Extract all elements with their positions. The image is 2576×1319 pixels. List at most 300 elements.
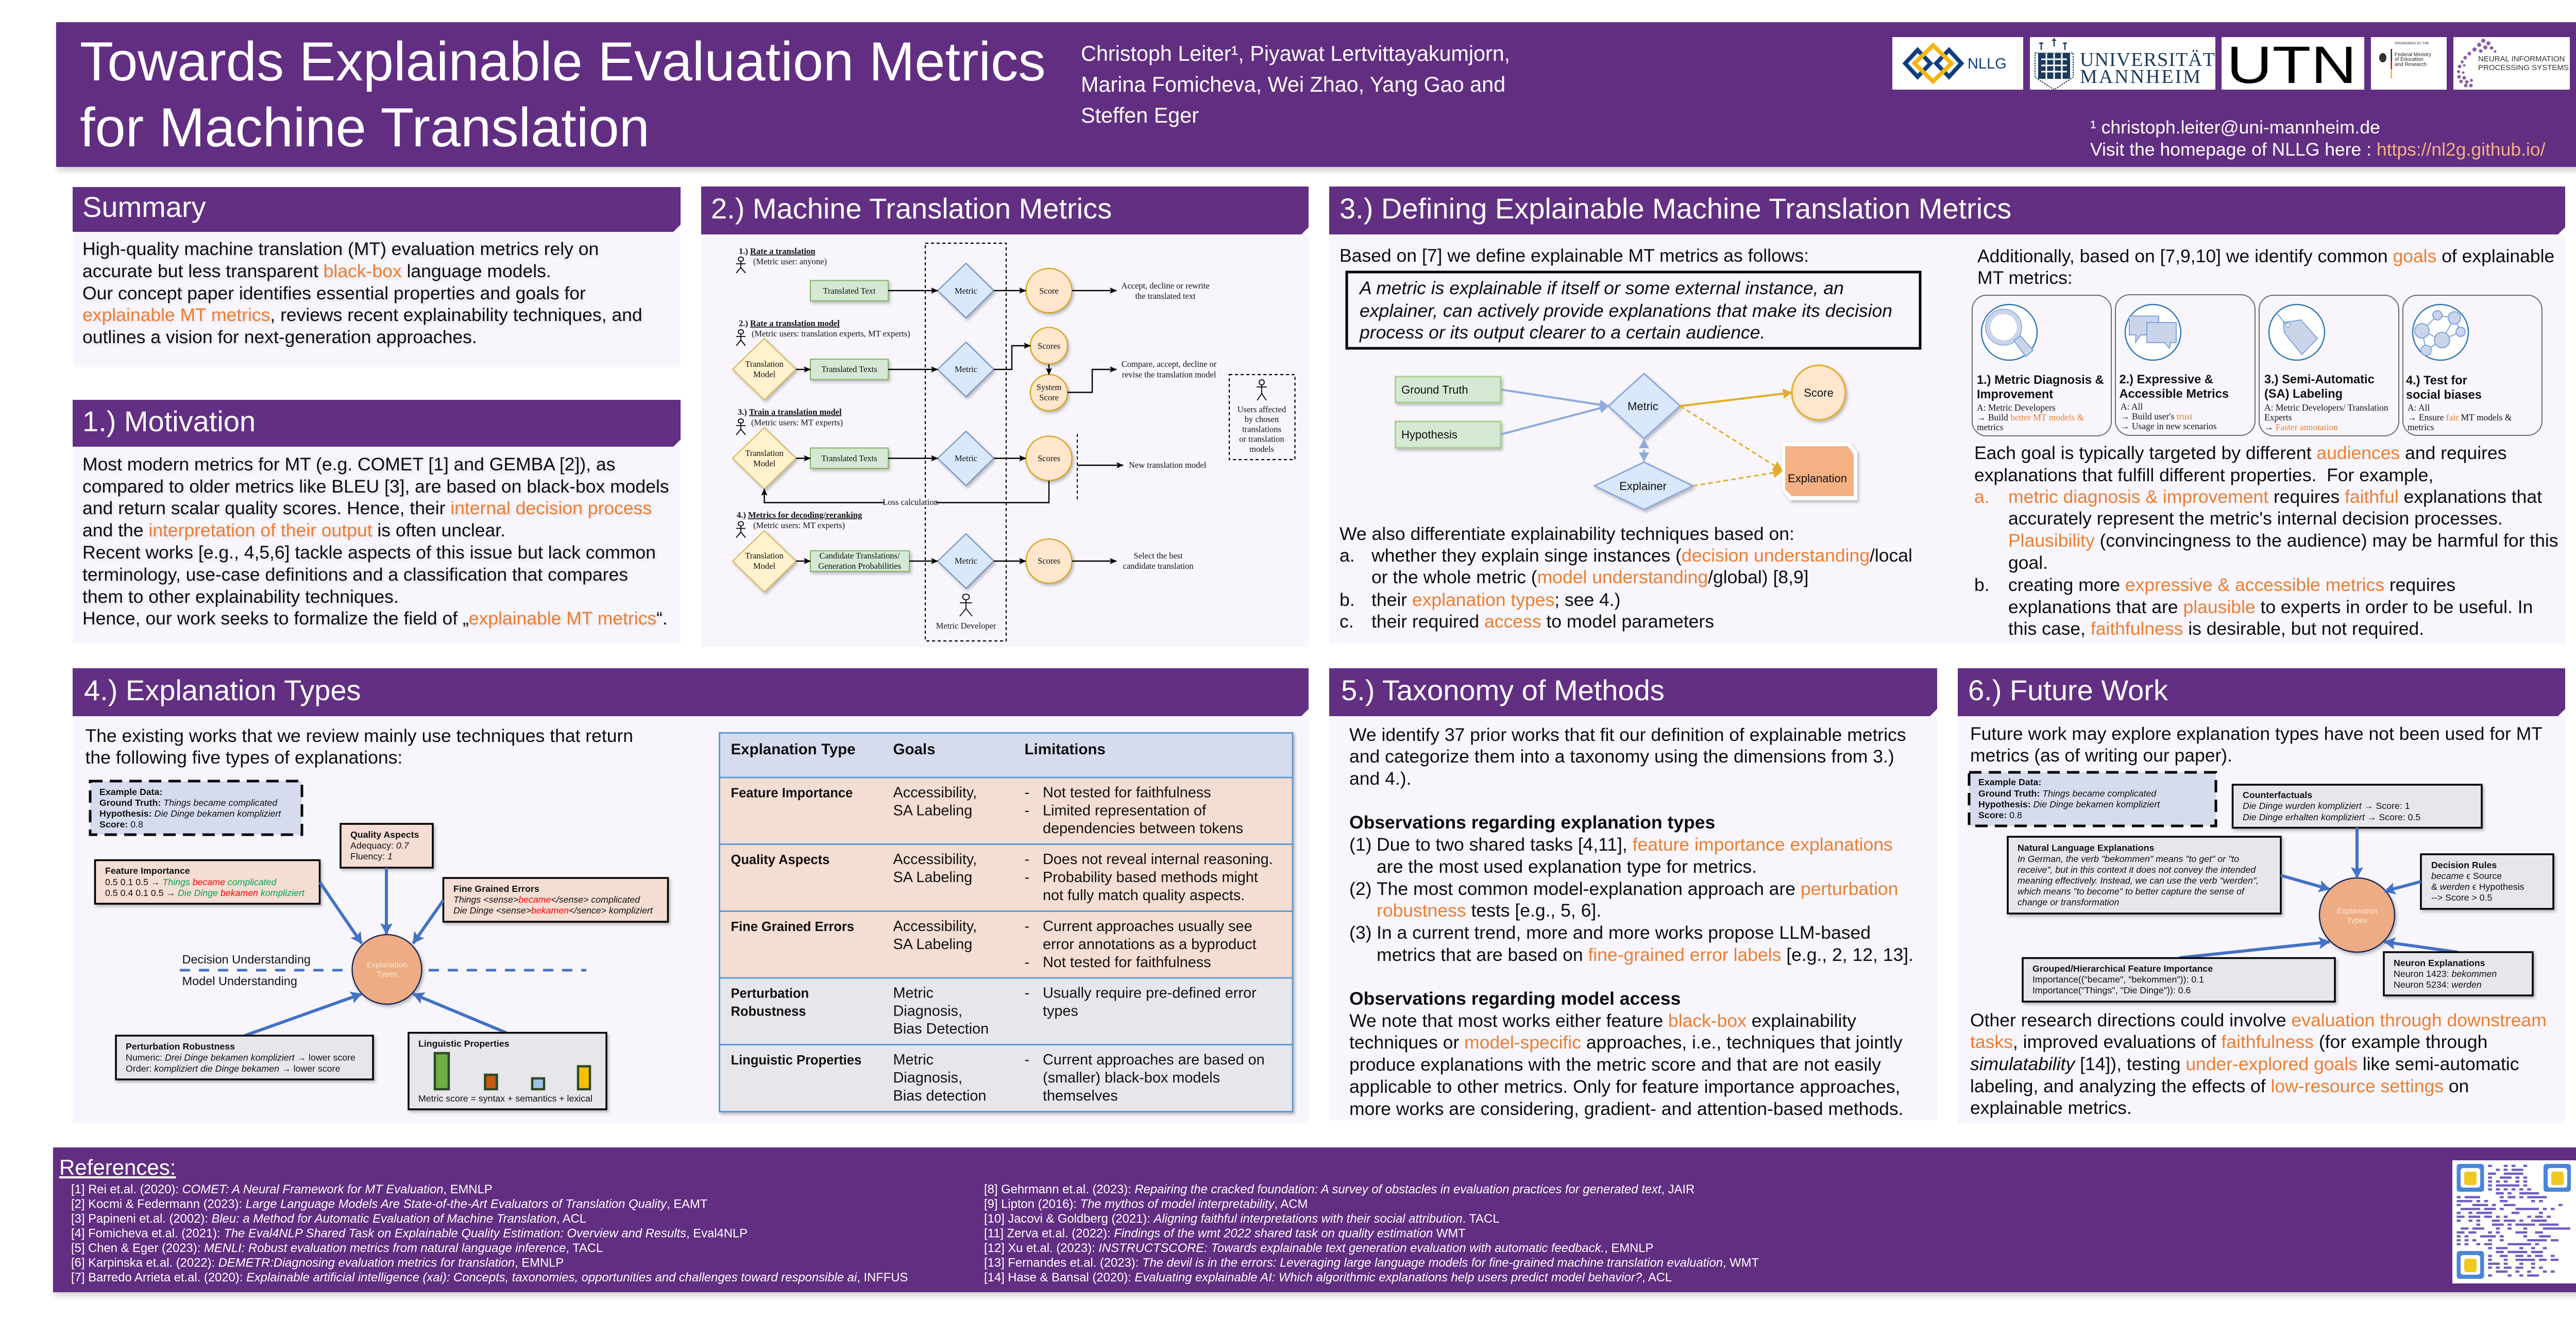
box: grouped feature importance: Importance(("became", "bekommen")): 0.1 [2032, 974, 2204, 985]
text: explanation types intro: The existing works that we review mainly use techniques that return [86, 725, 633, 746]
box: example data [90, 781, 302, 835]
text: observations on explanation types: are the most used explanation type for metrics. [1377, 856, 1757, 877]
text: explainability dimensions: whether they explain singe instances (decision understanding/local [1371, 545, 1912, 566]
table text: Not tested for faithfulness [1043, 954, 1211, 971]
box: perturbation robustness: Numeric: Drei Dinge bekamen kompliziert → lower score [126, 1052, 355, 1062]
text: explanation types intro [86, 725, 633, 768]
use case 2: rate a translation model: Metric [955, 364, 977, 374]
logo: NLLG: NLLG [1968, 56, 2007, 72]
card: social biases: A: All [2408, 402, 2430, 413]
diagram: future explanation types hub [1969, 772, 2553, 1002]
text: goals explanation: creating more expressive & accessible metrics requires [2008, 574, 2455, 595]
use case 3: train a translation model: Translation [745, 448, 784, 458]
box: decision rules: Decision Rules [2431, 860, 2497, 870]
card: metric diagnosis: 1.) Metric Diagnosis & [1977, 374, 2104, 387]
heading: machine translation metrics: 2.) Machine Translation Metrics [711, 192, 1112, 225]
box: feature importance: Feature Importance [105, 866, 190, 876]
hub: explanation types circle: Types [377, 970, 397, 979]
panel: future work [1958, 668, 2565, 1123]
text: explainability dimensions: b. [1340, 589, 1355, 610]
box: grouped feature importance: Importance("Things", "Die Dinge")): 0.6 [2032, 985, 2191, 995]
table: explanation types [719, 733, 1293, 1112]
box: linguistic properties [409, 1033, 606, 1109]
title: for Machine Translation [80, 97, 650, 158]
table text: error annotations as a byproduct [1043, 936, 1257, 953]
use case 3: train a translation model: New translation model [1129, 460, 1207, 470]
logo: University of Mannheim: UNIVERSITÄT [2080, 49, 2215, 71]
box: natural language explanations: change or transformation [2018, 897, 2119, 907]
heading: taxonomy of methods: 5.) Taxonomy of Methods [1341, 674, 1665, 706]
card: semi-automatic labeling: → Faster annotation [2264, 422, 2338, 432]
box: neuron explanations: Neuron Explanations [2394, 958, 2485, 968]
card: metric diagnosis: → Build better MT models & [1977, 412, 2084, 422]
callout: definition box: A metric is explainable if itself or some external instance, an [1359, 278, 1844, 298]
table text: SA Labeling [893, 936, 972, 953]
card: semi-automatic labeling: 3.) Semi-Automatic [2264, 373, 2375, 386]
use case 4: metrics for decoding: 4.) Metrics for decoding/reranking [737, 510, 862, 520]
table text: Linguistic Properties [731, 1053, 861, 1068]
use case 1: rate a translation [736, 246, 1210, 318]
use case 2: rate a translation model: revise the translation model [1122, 370, 1216, 379]
box: example data [1969, 772, 2216, 826]
text: goals explanation: explanations that are plausible to experts in order to be useful. In [2008, 597, 2533, 617]
table text: Robustness [731, 1005, 806, 1019]
text: observations on explanation types: The most common model-explanation approach are perturbation [1377, 878, 1898, 899]
heading: defining explainable MT metrics: 3.) Defining Explainable Machine Translation Metrics [1340, 192, 2011, 225]
use case 4: metrics for decoding: (Metric users: MT experts) [753, 520, 845, 530]
use case 2: rate a translation model: (Metric users: translation experts, MT experts) [752, 329, 910, 339]
logo: BMBF: and Research [2395, 62, 2427, 67]
use case 1: rate a translation: 1.) Rate a translation [739, 246, 815, 256]
box: quality aspects: Fluency: 1 [350, 851, 393, 861]
card: semi-automatic labeling [2259, 295, 2399, 436]
icon: metric developer: Metric Developer [936, 621, 996, 631]
logo: NeurIPS: NEURAL INFORMATION [2478, 55, 2565, 63]
text: goals explanation: this case, faithfulness is desirable, but not required. [2008, 618, 2424, 639]
text: references left column: [6] Karpinska et.al. (2022): DEMETR:Diagnosing evaluation metrics for translation, EMNLP [71, 1256, 564, 1270]
card: semi-automatic labeling: (SA) Labeling [2264, 387, 2343, 401]
heading: machine translation metrics [701, 187, 1309, 234]
card: expressive metrics: → Build user's trust [2121, 411, 2193, 421]
text: explainability dimensions: their required access to model parameters [1371, 611, 1714, 632]
text: observations on model access: We note that most works either feature black-box explainability [1349, 1010, 1856, 1031]
text: goals explanation: explanations that fulfill different properties. For example, [1974, 465, 2433, 485]
box: linguistic properties: Linguistic Properties [418, 1039, 510, 1049]
table text: - [1024, 851, 1029, 868]
panel: references [53, 1147, 2576, 1292]
table text: Goals [893, 741, 935, 758]
table text: Fine Grained Errors [731, 920, 854, 934]
use case 4: metrics for decoding: Metric [955, 556, 977, 566]
logo: BMBF: Federal Ministry [2395, 52, 2431, 58]
text: goals explanation: metric diagnosis & improvement requires faithful explanations that [2008, 486, 2542, 507]
panel: motivation [73, 400, 681, 645]
text: other research directions [1970, 1010, 2547, 1118]
card: semi-automatic labeling: Experts [2264, 412, 2292, 422]
diagram: explanation types hub [90, 781, 668, 1109]
text: definition intro: Based on [7] we define explainable MT metrics as follows: [1340, 245, 1809, 266]
table text: SA Labeling [893, 869, 972, 886]
text: observations on model access: produce explanations with the metric score and that are not easily [1349, 1054, 1881, 1075]
text: explainability dimensions: a. [1340, 545, 1355, 566]
use case 2: rate a translation model: 2.) Rate a translation model [739, 318, 840, 328]
text: taxonomy intro: We identify 37 prior works that fit our definition of explainable metrics [1349, 724, 1906, 745]
text: explainability dimensions: We also differentiate explainability techniques based on: [1340, 523, 1794, 544]
callout: users affected: by chosen [1245, 414, 1279, 424]
text: summary body: High-quality machine translation (MT) evaluation metrics rely on [82, 239, 599, 259]
box: grouped feature importance [2023, 958, 2335, 1002]
contact lines: Visit the homepage of NLLG here : https://nl2g.github.io/ [2090, 139, 2546, 160]
text: summary body: accurate but less transparent black-box language models. [82, 261, 551, 281]
text: goals explanation: Each goal is typically targeted by different audiences and requires [1974, 443, 2506, 463]
card: metric diagnosis: A: Metric Developers [1977, 402, 2056, 413]
text: observations on explanation types: (3) [1349, 922, 1371, 943]
logo: NeurIPS: PROCESSING SYSTEMS [2478, 63, 2569, 72]
use case 2: rate a translation model: Scores [1038, 341, 1060, 351]
text: goals explanation: b. [1974, 574, 1990, 595]
use case 4: metrics for decoding: candidate translation [1123, 561, 1193, 571]
logo: BMBF [2371, 37, 2447, 90]
heading: defining explainable MT metrics [1329, 187, 2565, 234]
use case 1: rate a translation: Score [1039, 286, 1059, 296]
use case 4: metrics for decoding: Scores [1038, 556, 1060, 566]
card: social biases: social biases [2406, 388, 2482, 402]
table text: not fully match quality aspects. [1043, 887, 1245, 904]
use case 1: rate a translation: (Metric user: anyone) [753, 257, 827, 266]
box: perturbation robustness: Perturbation Robustness [126, 1041, 235, 1052]
text: motivation body: and the interpretation of their output is often unclear. [82, 520, 505, 540]
text: references right column: [12] Xu et.al. (2023): INSTRUCTSCORE: Towards explainable text generation evaluation with automatic feedback., EMNLP [984, 1241, 1653, 1255]
logo: NeurIPS [2453, 37, 2570, 90]
diagram: explainable metric flow: Explanation [1788, 472, 1847, 485]
card: social biases [2403, 295, 2542, 435]
box: natural language explanations: which means "to become" to better capture the sense of [2018, 886, 2245, 897]
callout: users affected: translations [1242, 425, 1281, 434]
text: references right column: [13] Fernandes et.al. (2023): The devil is in the errors: Leveraging large language models for fine-grained machine translation evaluation, WMT [984, 1256, 1759, 1270]
hub: explanation types circle: Explanation [2337, 907, 2377, 916]
table text: Perturbation [731, 986, 809, 1001]
card: expressive metrics: → Usage in new scenarios [2121, 421, 2217, 431]
text: observations on explanation types: (1) [1349, 834, 1371, 855]
text: future work intro [1970, 723, 2543, 766]
text: explainability dimensions: c. [1340, 611, 1354, 632]
table text: Quality Aspects [731, 853, 829, 867]
box: quality aspects: Adequacy: 0.7 [350, 840, 410, 851]
text: references left column: [5] Chen & Eger (2023): MENLI: Robust evaluation metrics from natural language inference, TACL [71, 1241, 603, 1255]
box: neuron explanations: Neuron 5234: werden [2394, 979, 2482, 990]
text: summary body: outlines a vision for next-generation approaches. [82, 327, 477, 347]
text: references right column: [9] Lipton (2016): The mythos of model interpretability, ACM [984, 1197, 1308, 1211]
table text: - [1024, 784, 1029, 801]
text: references right column: [14] Hase & Bansal (2020): Evaluating explainable AI: Which algorithmic explanations help users predict model behavior?, ACL [984, 1271, 1672, 1284]
callout: definition box: explainer, can actively provide explanations that make its decision [1360, 300, 1892, 321]
title [80, 31, 1046, 158]
box: example data: Example Data: [99, 787, 162, 797]
text: references right column [984, 1182, 1759, 1284]
diagram: explainable metric flow: Explainer [1619, 480, 1667, 493]
table text: Accessibility, [893, 784, 977, 801]
text: references right column: [8] Gehrmann et.al. (2023): Repairing the cracked foundation: A survey of obstacles in evaluation practices for generated text, JAIR [984, 1182, 1694, 1196]
box: natural language explanations: receive", but in this context it does not convey the intended [2018, 865, 2256, 875]
card: expressive metrics: 2.) Expressive & [2120, 373, 2213, 386]
box: example data: Example Data: [1978, 777, 2041, 787]
text: goals intro [1977, 246, 2554, 288]
callout: users affected: Users affected [1238, 404, 1286, 414]
text: summary body [82, 239, 642, 347]
text: observations on model access [1349, 988, 1903, 1119]
use case 2: rate a translation model: Model [753, 369, 775, 379]
text: summary body: Our concept paper identifies essential properties and goals for [82, 283, 586, 303]
text: motivation body: terminology, use-case definitions and a classification that compares [82, 564, 628, 585]
table text: types [1043, 1003, 1078, 1019]
table text: Accessibility, [893, 918, 977, 935]
table text: Usually require pre-defined error [1043, 985, 1257, 1002]
use case 2: rate a translation model: Translated Texts [821, 364, 877, 374]
heading: summary: Summary [82, 191, 206, 223]
header banner [56, 22, 2576, 167]
text: other research directions: simulatability [14]), testing under-explored goals like semi-automatic [1970, 1054, 2519, 1074]
callout: definition box [1347, 272, 1920, 348]
table text: Not tested for faithfulness [1043, 784, 1211, 801]
use case 2: rate a translation model [733, 318, 1217, 411]
box: example data: Hypothesis: Die Dinge bekamen kompliziert [1978, 799, 2160, 809]
text: references right column: [11] Zerva et.al. (2022): Findings of the wmt 2022 shared task on quality estimation WMT [984, 1227, 1466, 1241]
text: observations on explanation types [1349, 812, 1913, 965]
box: natural language explanations [2008, 837, 2281, 914]
icon: tag [2269, 305, 2325, 360]
use case 4: metrics for decoding: Model [753, 561, 775, 571]
text: references left column: [3] Papineni et.al. (2002): Bleu: a Method for Automatic Evaluation of Machine Translation, ACL [71, 1212, 586, 1226]
hub: explanation types circle: Explanation [367, 960, 407, 970]
icon: speech bubbles [2125, 305, 2181, 360]
card: metric diagnosis: metrics [1977, 422, 2004, 432]
text: observations on model access: applicable to other metrics. Only for feature importance approaches, [1349, 1076, 1900, 1097]
panel: machine translation metrics [701, 187, 1309, 647]
box: natural language explanations: Natural Language Explanations [2018, 843, 2154, 853]
text: future work intro: Future work may explore explanation types have not been used for MT [1970, 723, 2543, 744]
hub: explanation types circle: Types [2347, 916, 2367, 925]
text: observations on model access: techniques or model-specific approaches, i.e., techniques that jointly [1349, 1032, 1903, 1053]
use case 3: train a translation model: (Metric users: MT experts) [751, 417, 843, 428]
card: metric diagnosis: Improvement [1977, 388, 2053, 401]
table text: Diagnosis, [893, 1003, 962, 1019]
heading: future work [1958, 668, 2565, 716]
box: neuron explanations [2384, 952, 2533, 995]
callout: users affected: or translation [1239, 434, 1284, 444]
text: observations on explanation types: In a current trend, more and more works propose LLM-based [1377, 922, 1871, 943]
box: fine grained errors [443, 878, 668, 922]
card: semi-automatic labeling: A: Metric Developers/ Translation [2264, 402, 2388, 413]
use case 1: rate a translation: the translated text [1135, 291, 1196, 301]
text: summary body: explainable MT metrics, reviews recent explainability techniques, and [82, 305, 642, 325]
heading: taxonomy of methods [1329, 668, 1937, 716]
card: expressive metrics: A: All [2121, 401, 2143, 412]
box: counterfactuals: Counterfactuals [2243, 790, 2312, 800]
card: metric diagnosis [1972, 295, 2111, 436]
use case 4: metrics for decoding: Candidate Translations/ [819, 551, 900, 561]
text: taxonomy intro: and categorize them into a taxonomy using the dimensions from 3.) [1349, 746, 1894, 767]
card: expressive metrics: Accessible Metrics [2120, 387, 2229, 401]
callout: definition box: process or its output clearer to a certain audience. [1359, 322, 1765, 343]
heading: references: References: [59, 1155, 176, 1179]
panel: defining explainable MT metrics [1329, 187, 2565, 645]
box: counterfactuals: Die Dinge erhalten kompliziert → Score: 0.5 [2243, 812, 2420, 822]
use case 4: metrics for decoding: Generation Probabilities [818, 561, 901, 571]
text: references left column: [1] Rei et.al. (2020): COMET: A Neural Framework for MT Evaluation, EMNLP [71, 1182, 493, 1196]
table text: Bias detection [893, 1088, 986, 1104]
text: observations on model access: more works are considering, gradient- and attention-based methods. [1349, 1098, 1903, 1119]
table text: SA Labeling [893, 803, 972, 819]
text: references left column: [4] Fomicheva et.al. (2021): The Eval4NLP Shared Task on Explainable Quality Estimation: Overview and Results, Eval4NLP [71, 1227, 748, 1241]
box: example data: Score: 0.8 [99, 819, 143, 830]
use case 1: rate a translation: Metric [955, 286, 977, 296]
text: goals explanation: Plausibility (convincingness to the audience) may be harmful for this [2008, 530, 2558, 551]
arrows into hub [2179, 827, 2458, 958]
box: counterfactuals [2233, 785, 2482, 827]
text: observations on explanation types: robustness tests [e.g., 5, 6]. [1377, 900, 1601, 921]
use case 3: train a translation model: Translated Texts [821, 453, 877, 463]
text: references left column [71, 1182, 908, 1284]
table text: - [1024, 1052, 1029, 1068]
diagram: explainable metric flow: Score [1804, 386, 1834, 399]
text: observations on explanation types: metrics that are based on fine-grained error labels [e.g., 2, 12, 13]. [1377, 944, 1913, 965]
text: observations on explanation types: Due to two shared tasks [4,11], feature importance explanations [1377, 834, 1893, 855]
box: example data: Hypothesis: Die Dinge bekamen kompliziert [99, 808, 281, 819]
box: decision rules [2421, 854, 2553, 909]
text: goals explanation [1974, 443, 2558, 639]
heading: future work: 6.) Future Work [1968, 674, 2168, 706]
diagram: explainable metric flow [1395, 365, 1857, 510]
table text: - [1024, 869, 1029, 886]
box: feature importance: 0.5 0.4 0.1 0.5 → Die Dinge bekamen kompliziert [105, 888, 305, 898]
authors: Marina Fomicheva, Wei Zhao, Yang Gao and [1081, 73, 1505, 96]
box: natural language explanations: In German, the verb "bekommen" means "to get" or "to [2018, 854, 2239, 864]
use case 2: rate a translation model: Score [1039, 393, 1059, 402]
logo: University of Mannheim [2030, 37, 2215, 90]
table text: (smaller) black-box models [1043, 1070, 1220, 1086]
hub: explanation types circle [352, 935, 421, 1004]
logo: UTN: UTN [2227, 36, 2357, 94]
text: other research directions: Other research directions could involve evaluation through downstream [1970, 1010, 2547, 1030]
box: decision rules: became ϵ Source [2431, 871, 2502, 881]
box: grouped feature importance: Grouped/Hierarchical Feature Importance [2032, 963, 2213, 974]
text: explainability dimensions: their explanation types; see 4.) [1371, 589, 1621, 610]
table text: Metric [893, 985, 934, 1002]
diagram: explainable metric flow: Ground Truth [1401, 383, 1468, 396]
table text: dependencies between tokens [1043, 820, 1243, 837]
table text: Diagnosis, [893, 1070, 962, 1086]
text: future work intro: metrics (as of writing our paper). [1970, 745, 2232, 766]
box: fine grained errors: Die Dinge <sense>bekamen</sence> kompliziert [453, 905, 653, 916]
box: feature importance: 0.5 0.1 0.5 → Things became complicated [105, 877, 277, 887]
card: social biases: metrics [2408, 422, 2434, 432]
callout: users affected [1229, 375, 1295, 460]
box: linguistic properties: Metric score = syntax + semantics + lexical [418, 1093, 592, 1104]
use case 4: metrics for decoding: Translation [745, 551, 784, 561]
text: references left column: [2] Kocmi & Federmann (2023): Large Language Models Are State-of-the-Art Evaluators of Translation Quality, EAMT [71, 1197, 707, 1211]
text: taxonomy intro: and 4.). [1349, 768, 1411, 789]
heading: motivation: 1.) Motivation [82, 405, 256, 437]
authors [1081, 42, 1510, 127]
contact lines [2090, 117, 2546, 160]
card: social biases: → Ensure fair MT models & [2408, 412, 2512, 422]
text: goals explanation: accurately represent the metric's internal decision processes. [2008, 508, 2503, 529]
arrows into hub [245, 868, 506, 1036]
title: Towards Explainable Evaluation Metrics [80, 31, 1046, 92]
text: observations on explanation types: Observations regarding explanation types [1349, 812, 1715, 833]
text: taxonomy intro [1349, 724, 1906, 789]
panel: taxonomy of methods [1329, 668, 1937, 1121]
box: example data: Score: 0.8 [1978, 810, 2022, 820]
table text: - [1024, 985, 1029, 1002]
text: motivation body: Hence, our work seeks to formalize the field of „explainable MT metrics“. [82, 608, 668, 629]
chart: linguistic bars [435, 1053, 590, 1089]
box: feature importance [95, 860, 319, 904]
use case 3: train a translation model: Model [753, 459, 775, 468]
table text: Feature Importance [731, 786, 853, 801]
table text: Bias Detection [893, 1021, 989, 1037]
card: expressive metrics [2115, 295, 2255, 435]
text: goals intro: MT metrics: [1977, 267, 2073, 288]
table text: themselves [1043, 1088, 1118, 1104]
box: counterfactuals: Die Dinge wurden kompliziert → Score: 1 [2243, 801, 2410, 811]
text: motivation body: and return scalar quality scores. Hence, their internal decision process [82, 498, 652, 518]
box: example data: Ground Truth: Things became complicated [1978, 788, 2157, 799]
text: goals intro: Additionally, based on [7,9,10] we identify common goals of explainable [1977, 246, 2554, 266]
table text: - [1024, 803, 1029, 819]
use case 4: metrics for decoding [733, 510, 1193, 592]
box: fine grained errors: Fine Grained Errors [453, 884, 539, 894]
box: perturbation robustness [116, 1036, 373, 1079]
diagram: explainable metric flow: Hypothesis [1401, 428, 1458, 441]
text: references left column: [7] Barredo Arrieta et.al. (2020): Explainable artificial intelligence (xai): Concepts, taxonomies, opportunities and challenges toward responsible ai, INFFUS [71, 1271, 908, 1284]
logo: BMBF: of Education [2395, 57, 2424, 62]
use case 3: train a translation model [733, 407, 1207, 507]
text: goals explanation: a. [1974, 486, 1990, 507]
text: motivation body: them to other explainability techniques. [82, 586, 399, 607]
table text: Limited representation of [1043, 803, 1207, 819]
use case 3: train a translation model: Scores [1038, 453, 1060, 463]
box: decision rules: & werden ϵ Hypothesis [2431, 882, 2524, 892]
box: quality aspects: Quality Aspects [350, 830, 419, 840]
box: decision rules: --> Score > 0.5 [2431, 892, 2493, 903]
table text: Metric [893, 1052, 934, 1068]
heading: explanation types [73, 668, 1309, 716]
icon: metric developer [936, 594, 996, 631]
text: other research directions: labeling, and analyzing the effects of low-resource settings on [1970, 1076, 2469, 1096]
authors: Christoph Leiter¹, Piyawat Lertvittayakumjorn, [1081, 42, 1510, 65]
use case 2: rate a translation model: Translation [745, 359, 784, 369]
card: social biases: 4.) Test for [2406, 374, 2467, 387]
icon: magnifier [1981, 305, 2037, 360]
table text: Probability based methods might [1043, 869, 1258, 886]
use case 3: train a translation model: 3.) Train a translation model [738, 407, 842, 417]
table text: Current approaches usually see [1043, 918, 1252, 935]
box: perturbation robustness: Order: kompliziert die Dinge bekamen → lower score [126, 1063, 340, 1074]
box: quality aspects [341, 824, 433, 868]
text: observations on model access: Observations regarding model access [1349, 988, 1681, 1009]
contact lines: ¹ christoph.leiter@uni-mannheim.de [2090, 117, 2380, 138]
authors: Steffen Eger [1081, 104, 1199, 127]
callout: users affected: models [1249, 444, 1274, 454]
table text: Limitations [1024, 741, 1106, 758]
text: goals explanation: goal. [2008, 552, 2048, 573]
text: explanation types intro: the following five types of explanations: [86, 747, 402, 768]
text: observations on explanation types: (2) [1349, 878, 1371, 899]
label: model understanding: Model Understanding [182, 974, 297, 988]
icon: QR code [2452, 1160, 2576, 1283]
table text: Explanation Type [731, 741, 856, 758]
